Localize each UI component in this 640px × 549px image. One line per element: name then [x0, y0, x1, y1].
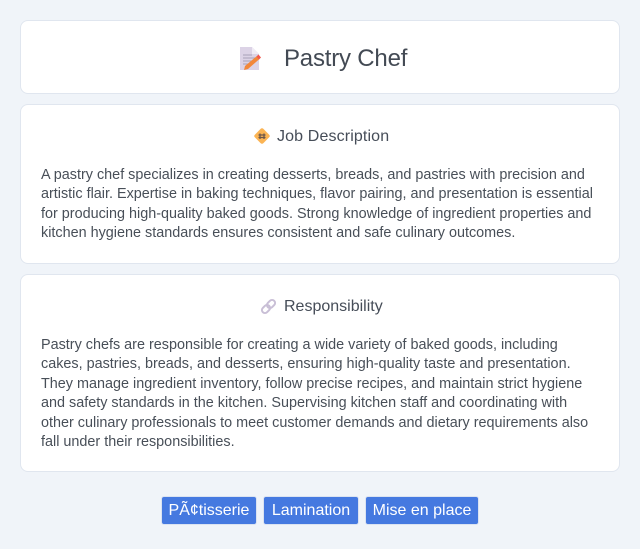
tag: Pâtisserie: [161, 496, 257, 525]
heading: job description: Job Description: [277, 128, 389, 145]
tag: Lamination: [263, 496, 359, 525]
text block: job description: artistic flair. Expertise in baking techniques, flavor pairing, and presentation is essential: [41, 186, 593, 202]
panel: job description: [20, 104, 620, 264]
text block: job description: for producing high-quality baked goods. Strong knowledge of ingredient properties and: [41, 206, 591, 222]
text block: responsibility: fall under their responsibilities.: [41, 434, 235, 450]
text block: job description: A pastry chef specializes in creating desserts, breads, and pastries with precision and: [41, 167, 585, 183]
text block: responsibility: cakes, pastries, breads, and desserts, ensuring high-quality taste and presentation.: [41, 356, 571, 372]
text block: responsibility: They manage ingredient inventory, follow precise recipes, and maintain strict hygiene: [41, 376, 582, 392]
text block: responsibility: Pastry chefs are responsible for creating a wide variety of baked goods, including: [41, 337, 558, 353]
icon: orange diamond sign: [254, 128, 270, 144]
tag: Lamination: Lamination: [272, 502, 350, 519]
text block: job description: [41, 167, 593, 241]
panel: responsibility: [20, 274, 620, 472]
text block: responsibility: [41, 337, 588, 450]
text block: responsibility: and safety standards in the kitchen. Supervising kitchen staff and coordinating with: [41, 395, 567, 411]
title: Pastry Chef: [284, 45, 407, 72]
icon: chain link: [261, 299, 276, 314]
tag: Mise en place: Mise en place: [373, 502, 471, 519]
icon: document with pencil: [240, 47, 261, 70]
text block: responsibility: other culinary professionals to meet customer demands and dietary requirements also: [41, 415, 588, 431]
panel: title card: [20, 20, 620, 94]
heading: responsibility: Responsibility: [284, 298, 383, 315]
tag: Mise en place: [365, 496, 479, 525]
text block: job description: kitchen hygiene standards ensures consistent and safe culinary outcomes.: [41, 225, 515, 241]
tag: Pâtisserie: PÃ¢tisserie: [169, 502, 249, 519]
